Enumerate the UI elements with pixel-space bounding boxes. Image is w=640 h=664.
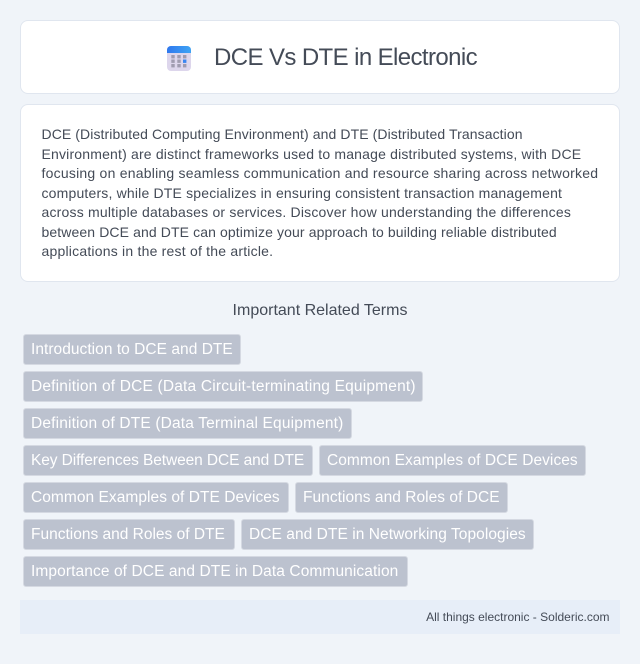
- tag: DCE and DTE in Networking Topologies: [249, 526, 526, 543]
- tag: [295, 482, 508, 513]
- intro text panel: [20, 104, 620, 282]
- tag: Functions and Roles of DTE: [31, 526, 225, 543]
- tag: [23, 519, 235, 550]
- intro line 4: computers, while DTE specializes in ensuring consistent transaction management: [42, 184, 562, 200]
- footer: [20, 600, 620, 634]
- tag: Importance of DCE and DTE in Data Communication: [31, 563, 398, 580]
- intro line 7: applications in the rest of the article.: [42, 243, 273, 259]
- tag: [23, 482, 289, 513]
- tag: Introduction to DCE and DTE: [31, 341, 233, 358]
- intro line 2: Environment) are distinct frameworks used to manage distributed systems, with DCE: [42, 146, 581, 162]
- tag: Definition of DCE (Data Circuit-terminating Equipment): [31, 378, 416, 395]
- section heading: Important Related Terms: [233, 302, 407, 319]
- tag: Common Examples of DTE Devices: [31, 489, 280, 506]
- tag: Common Examples of DCE Devices: [327, 452, 578, 469]
- tag: [23, 408, 352, 439]
- tag: [319, 445, 586, 476]
- title: DCE Vs DTE in Electronic: [214, 44, 477, 71]
- tag: Functions and Roles of DCE: [303, 489, 500, 506]
- icon: calendar: [167, 46, 191, 71]
- tag: [23, 556, 408, 587]
- intro line 5: across multiple databases or services. Discover how understanding the differences: [42, 204, 571, 220]
- tag: Key Differences Between DCE and DTE: [31, 452, 304, 469]
- intro line 1: DCE (Distributed Computing Environment) and DTE (Distributed Transaction: [42, 126, 523, 142]
- tag: [23, 445, 313, 476]
- intro line 3: focusing on enabling seamless communication and resource sharing across networked: [42, 165, 598, 181]
- tag: [23, 371, 423, 402]
- header panel: [20, 20, 620, 94]
- tag: [241, 519, 534, 550]
- tag: [23, 334, 241, 365]
- related terms tags: [23, 334, 586, 587]
- intro line 6: between DCE and DTE can optimize your approach to building reliable distributed: [42, 224, 557, 240]
- footer credit: All things electronic - Solderic.com: [426, 610, 610, 624]
- tag: Definition of DTE (Data Terminal Equipment): [31, 415, 343, 432]
